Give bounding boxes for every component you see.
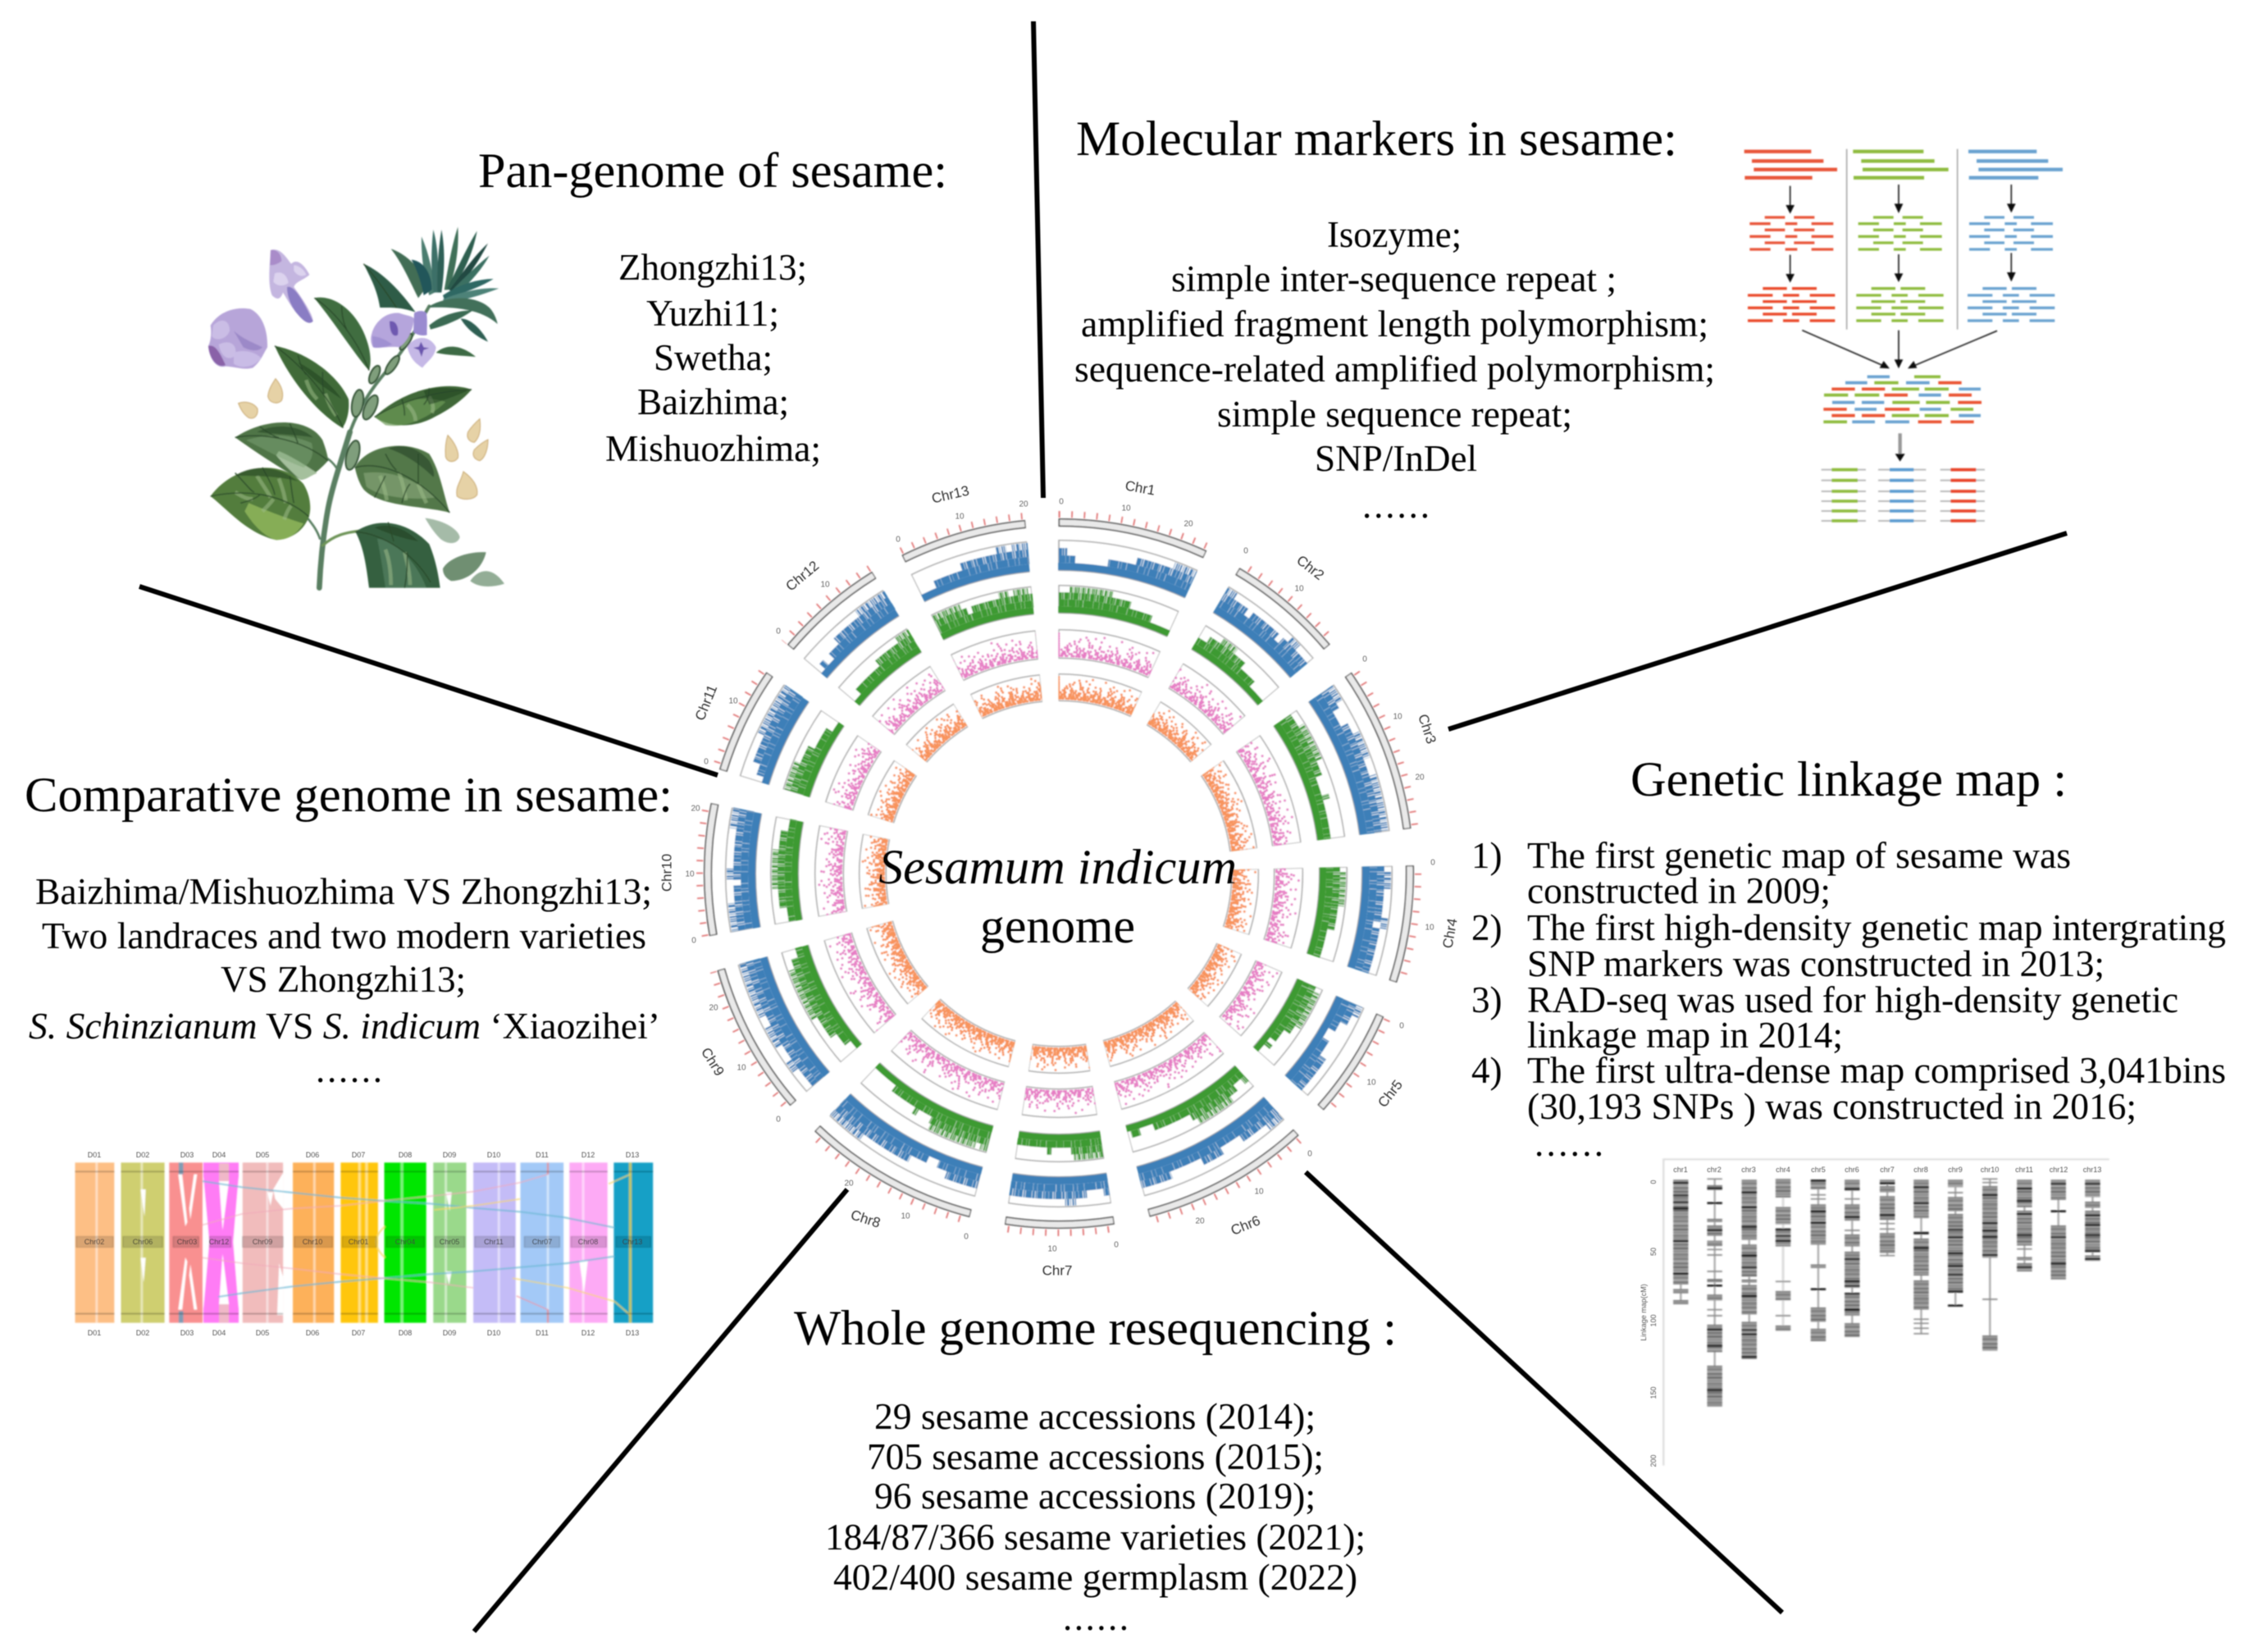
bottom chromosome labels: D10	[487, 1329, 500, 1337]
middle chromosome labels: Chr02	[84, 1238, 104, 1246]
chromosome blocks	[75, 1162, 653, 1323]
top chromosome labels: D11	[536, 1151, 549, 1159]
chromosome tick numbers: 0	[1114, 1241, 1119, 1250]
sprig of narrow leaves	[391, 227, 499, 357]
chromosome tick numbers	[685, 498, 1435, 1254]
chromosome names: chr1	[1673, 1166, 1688, 1174]
list of marker types: ......	[1362, 485, 1430, 526]
chromosome tick numbers: 10	[1121, 504, 1131, 513]
seed pods on stem	[343, 332, 414, 472]
chromosome labels: Chr2	[1293, 552, 1327, 583]
chromosome names: chr6	[1845, 1166, 1859, 1174]
chromosome labels: Chr10	[659, 854, 674, 892]
chromosome tick numbers: 20	[1019, 500, 1028, 509]
numbered milestones: (30,193 SNPs ) was constructed in 2016;	[1527, 1086, 2137, 1127]
y axis labels: 200	[1649, 1454, 1658, 1467]
chromosome tick numbers: 10	[737, 1064, 746, 1073]
middle chromosome labels: Chr03	[177, 1238, 197, 1246]
pooled fragments	[1823, 376, 1982, 422]
chromosome names: chr4	[1776, 1166, 1790, 1174]
green histogram track	[771, 586, 1347, 1161]
chromosome tick numbers: 0	[1430, 859, 1435, 868]
chromosome names: chr5	[1811, 1166, 1826, 1174]
flower cluster on sprig	[371, 311, 436, 367]
top chromosome labels: D10	[487, 1151, 500, 1159]
top chromosome labels: D12	[581, 1151, 595, 1159]
chromosome tick numbers: 10	[1254, 1188, 1264, 1197]
horizontal bands and centre boxes	[75, 1171, 653, 1314]
chromosome labels: Chr7	[1042, 1262, 1072, 1278]
list of marker types: simple sequence repeat;	[1217, 394, 1572, 435]
chromosome tick numbers: 0	[1399, 1022, 1404, 1031]
list of marker types: simple inter-sequence repeat ;	[1171, 258, 1617, 299]
comparison list: VS Zhongzhi13;	[221, 959, 466, 1000]
bottom chromosome labels: D05	[256, 1329, 269, 1337]
y axis labels: 100	[1649, 1314, 1658, 1327]
resequencing list: ......	[1063, 1597, 1129, 1638]
chromosome tick numbers: 0	[896, 536, 901, 545]
panel: genetic linkage map	[1471, 752, 2226, 1467]
middle chromosome labels: Chr05	[440, 1238, 459, 1246]
final sorted reads	[1822, 470, 1985, 521]
middle chromosome labels: Chr04	[395, 1238, 415, 1246]
heading: molecular markers: Molecular markers in sesame:	[1076, 112, 1677, 166]
chromosome labels	[659, 477, 1461, 1278]
marker pipeline diagram	[1744, 149, 2063, 521]
resequencing list: 184/87/366 sesame varieties (2021);	[825, 1517, 1366, 1558]
top chromosome labels: D02	[136, 1151, 149, 1159]
list of pan-genome varieties: Yuzhi11;	[646, 293, 779, 334]
detached capsules	[425, 518, 504, 586]
chromosome tick numbers: 20	[691, 805, 700, 814]
comparison list: ......	[316, 1049, 382, 1090]
chromosome names: chr7	[1880, 1166, 1895, 1174]
top chromosome labels: D07	[352, 1151, 365, 1159]
centre title: Sesamum indicum	[878, 840, 1237, 894]
resequencing list	[825, 1396, 1366, 1638]
chromosome labels: Chr6	[1229, 1212, 1262, 1239]
resequencing list: 402/400 sesame germplasm (2022)	[833, 1557, 1357, 1598]
centre title	[878, 840, 1237, 953]
chromosome tick numbers: 10	[901, 1212, 910, 1221]
y axis labels: 50	[1649, 1248, 1658, 1256]
synteny ribbons	[181, 1162, 630, 1323]
chromosome names: chr12	[2050, 1166, 2068, 1174]
chromosome tick numbers: 0	[1243, 547, 1248, 556]
list of pan-genome varieties	[605, 247, 821, 469]
numbered milestones: constructed in 2009;	[1527, 870, 1831, 911]
top sequence reads	[1744, 152, 2063, 178]
chromosome spines	[1681, 1179, 2092, 1407]
chromosome tick numbers: 0	[1059, 498, 1064, 507]
orange scatter track	[863, 678, 1255, 1070]
sesame seeds	[239, 379, 488, 500]
chromosome labels: Chr4	[1439, 917, 1461, 950]
chromosome names: chr13	[2083, 1166, 2101, 1174]
numbered milestones: The first high-density genetic map intergrating	[1527, 907, 2226, 948]
chromosome tick numbers: 10	[1047, 1245, 1057, 1254]
chromosome labels: Chr8	[849, 1207, 883, 1231]
chromosome tick numbers: 0	[776, 627, 781, 637]
resequencing list: 96 sesame accessions (2019);	[874, 1476, 1316, 1517]
synteny chart	[75, 1151, 653, 1337]
list of pan-genome varieties: Baizhima;	[637, 381, 789, 422]
numbered milestones: linkage map in 2014;	[1527, 1015, 1843, 1056]
bottom chromosome labels: D12	[581, 1329, 595, 1337]
ideogram ring	[708, 523, 1410, 1225]
resequencing list: 29 sesame accessions (2014);	[874, 1396, 1316, 1437]
chromosome labels: Chr3	[1415, 712, 1439, 746]
numbered milestones: ......	[1535, 1123, 1603, 1164]
chromosome tick numbers: 20	[1195, 1217, 1205, 1226]
middle chromosome labels: Chr09	[253, 1238, 272, 1246]
numbered milestones: RAD-seq was used for high-density genetic	[1527, 979, 2178, 1020]
comparison list	[29, 871, 660, 1090]
centre title: genome	[980, 899, 1135, 953]
bottom chromosome labels: D04	[212, 1329, 226, 1337]
heading: whole genome resequencing: Whole genome resequencing :	[794, 1301, 1397, 1355]
chromosome tick numbers: 10	[1393, 713, 1402, 722]
chromosome labels: Chr1	[1124, 477, 1156, 499]
panel: whole genome resequencing	[794, 1301, 1397, 1638]
chromosome tick numbers: 20	[709, 1004, 718, 1013]
bottom chromosome labels: D03	[180, 1329, 194, 1337]
chromosome tick numbers: 20	[844, 1180, 854, 1189]
bottom chromosome labels	[88, 1329, 639, 1337]
bottom chromosome labels: D07	[352, 1329, 365, 1337]
list of pan-genome varieties: Mishuozhima;	[605, 428, 821, 469]
chromosome tick numbers: 0	[691, 937, 696, 946]
middle chromosome labels: Chr01	[349, 1238, 368, 1246]
chromosome tick numbers: 10	[820, 581, 830, 590]
blue histogram track	[725, 542, 1392, 1207]
top chromosome labels: D13	[626, 1151, 639, 1159]
panel: comparative genome in sesame	[25, 768, 673, 1337]
chromosome tick numbers: 20	[1415, 774, 1425, 783]
stem and branches	[308, 306, 429, 588]
middle chromosome labels: Chr06	[133, 1238, 153, 1246]
chart: circular genome plot	[696, 510, 1422, 1237]
pink scatter track	[819, 633, 1299, 1114]
column dividers	[1847, 149, 1958, 330]
chromosome names: chr3	[1741, 1166, 1756, 1174]
bottom chromosome labels: D02	[136, 1329, 149, 1337]
bottom chromosome labels: D13	[626, 1329, 639, 1337]
list of pan-genome varieties: Zhongzhi13;	[618, 247, 807, 288]
numbered milestones: 2)	[1471, 907, 1503, 948]
list of pan-genome varieties: Swetha;	[654, 337, 773, 378]
list of marker types: sequence-related amplified polymorphism;	[1074, 349, 1715, 390]
icon: sesame plant illustration	[208, 227, 504, 588]
top chromosome labels: D09	[443, 1151, 456, 1159]
chromosome tick numbers: 0	[704, 758, 709, 767]
panel: molecular markers in sesame	[1074, 112, 2063, 526]
bottom chromosome labels: D09	[443, 1329, 456, 1337]
dark dense bands	[1673, 1180, 2100, 1390]
axes	[1663, 1159, 2109, 1466]
chromosome labels: Chr5	[1375, 1077, 1406, 1111]
purple flowers	[208, 249, 436, 368]
top chromosome labels	[88, 1151, 639, 1159]
chromosome names: chr10	[1981, 1166, 1999, 1174]
single and light marker ticks	[1707, 1179, 2032, 1334]
list of marker types: Isozyme;	[1327, 214, 1462, 255]
chromosome tick numbers: 0	[776, 1116, 781, 1125]
chromosome tick numbers: 0	[964, 1233, 969, 1242]
heading: comparative genome: Comparative genome in sesame:	[25, 768, 673, 822]
middle chromosome labels	[84, 1238, 642, 1246]
track boxes	[741, 555, 1377, 1192]
chromosome labels: Chr13	[930, 483, 970, 506]
top chromosome labels: D05	[256, 1151, 269, 1159]
heading: genetic linkage map: Genetic linkage map :	[1630, 752, 2067, 806]
numbered milestones: SNP markers was constructed in 2013;	[1527, 943, 2105, 984]
numbered milestones: 4)	[1471, 1050, 1503, 1091]
chromosome names: chr9	[1948, 1166, 1963, 1174]
middle chromosome labels: Chr10	[303, 1238, 322, 1246]
dark leaf patches	[235, 363, 467, 541]
vertical light stripes	[97, 1162, 583, 1323]
resequencing list: 705 sesame accessions (2015);	[867, 1436, 1324, 1477]
chromosome names: chr2	[1707, 1166, 1722, 1174]
chromosome tick numbers: 10	[1294, 585, 1304, 594]
chromosome names: chr11	[2015, 1166, 2033, 1174]
bottom chromosome labels: D11	[536, 1329, 549, 1337]
panel: pan-genome of sesame	[208, 144, 947, 588]
list of marker types	[1074, 214, 1715, 526]
heading: pan-genome: Pan-genome of sesame:	[478, 144, 947, 198]
list of marker types: SNP/InDel	[1315, 438, 1477, 479]
numbered milestones: 1)	[1471, 835, 1503, 876]
top chromosome labels: D08	[399, 1151, 412, 1159]
bottom chromosome labels: D01	[88, 1329, 101, 1337]
axis ticks	[700, 514, 1418, 1233]
chromosome tick numbers: 20	[1184, 520, 1193, 529]
middle chromosome labels: Chr13	[623, 1238, 642, 1246]
chromosome tick numbers: 10	[728, 697, 738, 706]
y axis labels: 150	[1649, 1386, 1658, 1399]
comparison list: S. Schinzianum VS S. indicum ‘Xiaozihei’	[29, 1006, 660, 1047]
top chromosome labels: D01	[88, 1151, 101, 1159]
comparison list: Two landraces and two modern varieties	[42, 915, 646, 956]
middle chromosome labels: Chr08	[578, 1238, 598, 1246]
numbered milestones	[1471, 835, 2226, 1164]
chromosome names: chr8	[1913, 1166, 1928, 1174]
chromosome tick numbers: 0	[1307, 1150, 1312, 1159]
middle chromosome labels: Chr11	[484, 1238, 504, 1246]
leaves	[211, 264, 472, 588]
digested fragments	[1748, 217, 2055, 321]
chromosome tick numbers: 0	[1362, 655, 1367, 664]
comparison list: Baizhima/Mishuozhima VS Zhongzhi13;	[35, 871, 652, 912]
chromosome tick numbers: 10	[1425, 924, 1434, 933]
numbered milestones: 3)	[1471, 979, 1503, 1020]
chromosome labels: Chr11	[692, 682, 720, 723]
top chromosome labels: D03	[180, 1151, 194, 1159]
chromosome labels: Chr12	[783, 558, 822, 594]
bottom chromosome labels: D06	[306, 1329, 319, 1337]
numbered milestones: The first ultra-dense map comprised 3,041bins	[1527, 1050, 2226, 1091]
marker bands	[1681, 1179, 2092, 1407]
top chromosome labels: D04	[212, 1151, 226, 1159]
chromosome labels: Chr9	[698, 1045, 727, 1079]
bottom chromosome labels: D08	[399, 1329, 412, 1337]
middle chromosome labels: Chr12	[209, 1238, 229, 1246]
chromosome tick numbers: 10	[955, 513, 965, 522]
white gaps inside blocks	[140, 1173, 588, 1315]
numbered milestones: The first genetic map of sesame was	[1527, 835, 2071, 876]
arrows	[1786, 185, 2016, 462]
list of marker types: amplified fragment length polymorphism;	[1081, 303, 1708, 345]
leaf shading stripes	[235, 380, 433, 585]
middle chromosome labels: Chr07	[532, 1238, 552, 1246]
chromosome tick numbers: 10	[685, 870, 695, 879]
y axis labels	[1640, 1180, 1658, 1467]
leaf veins	[211, 264, 472, 588]
chromosome tick numbers: 10	[1366, 1079, 1376, 1088]
y axis labels: Linkage map(cM)	[1640, 1284, 1648, 1341]
y axis labels: 0	[1649, 1180, 1658, 1184]
linkage map chart	[1640, 1159, 2109, 1467]
top chromosome labels: D06	[306, 1151, 319, 1159]
chromosome names	[1673, 1166, 2101, 1174]
